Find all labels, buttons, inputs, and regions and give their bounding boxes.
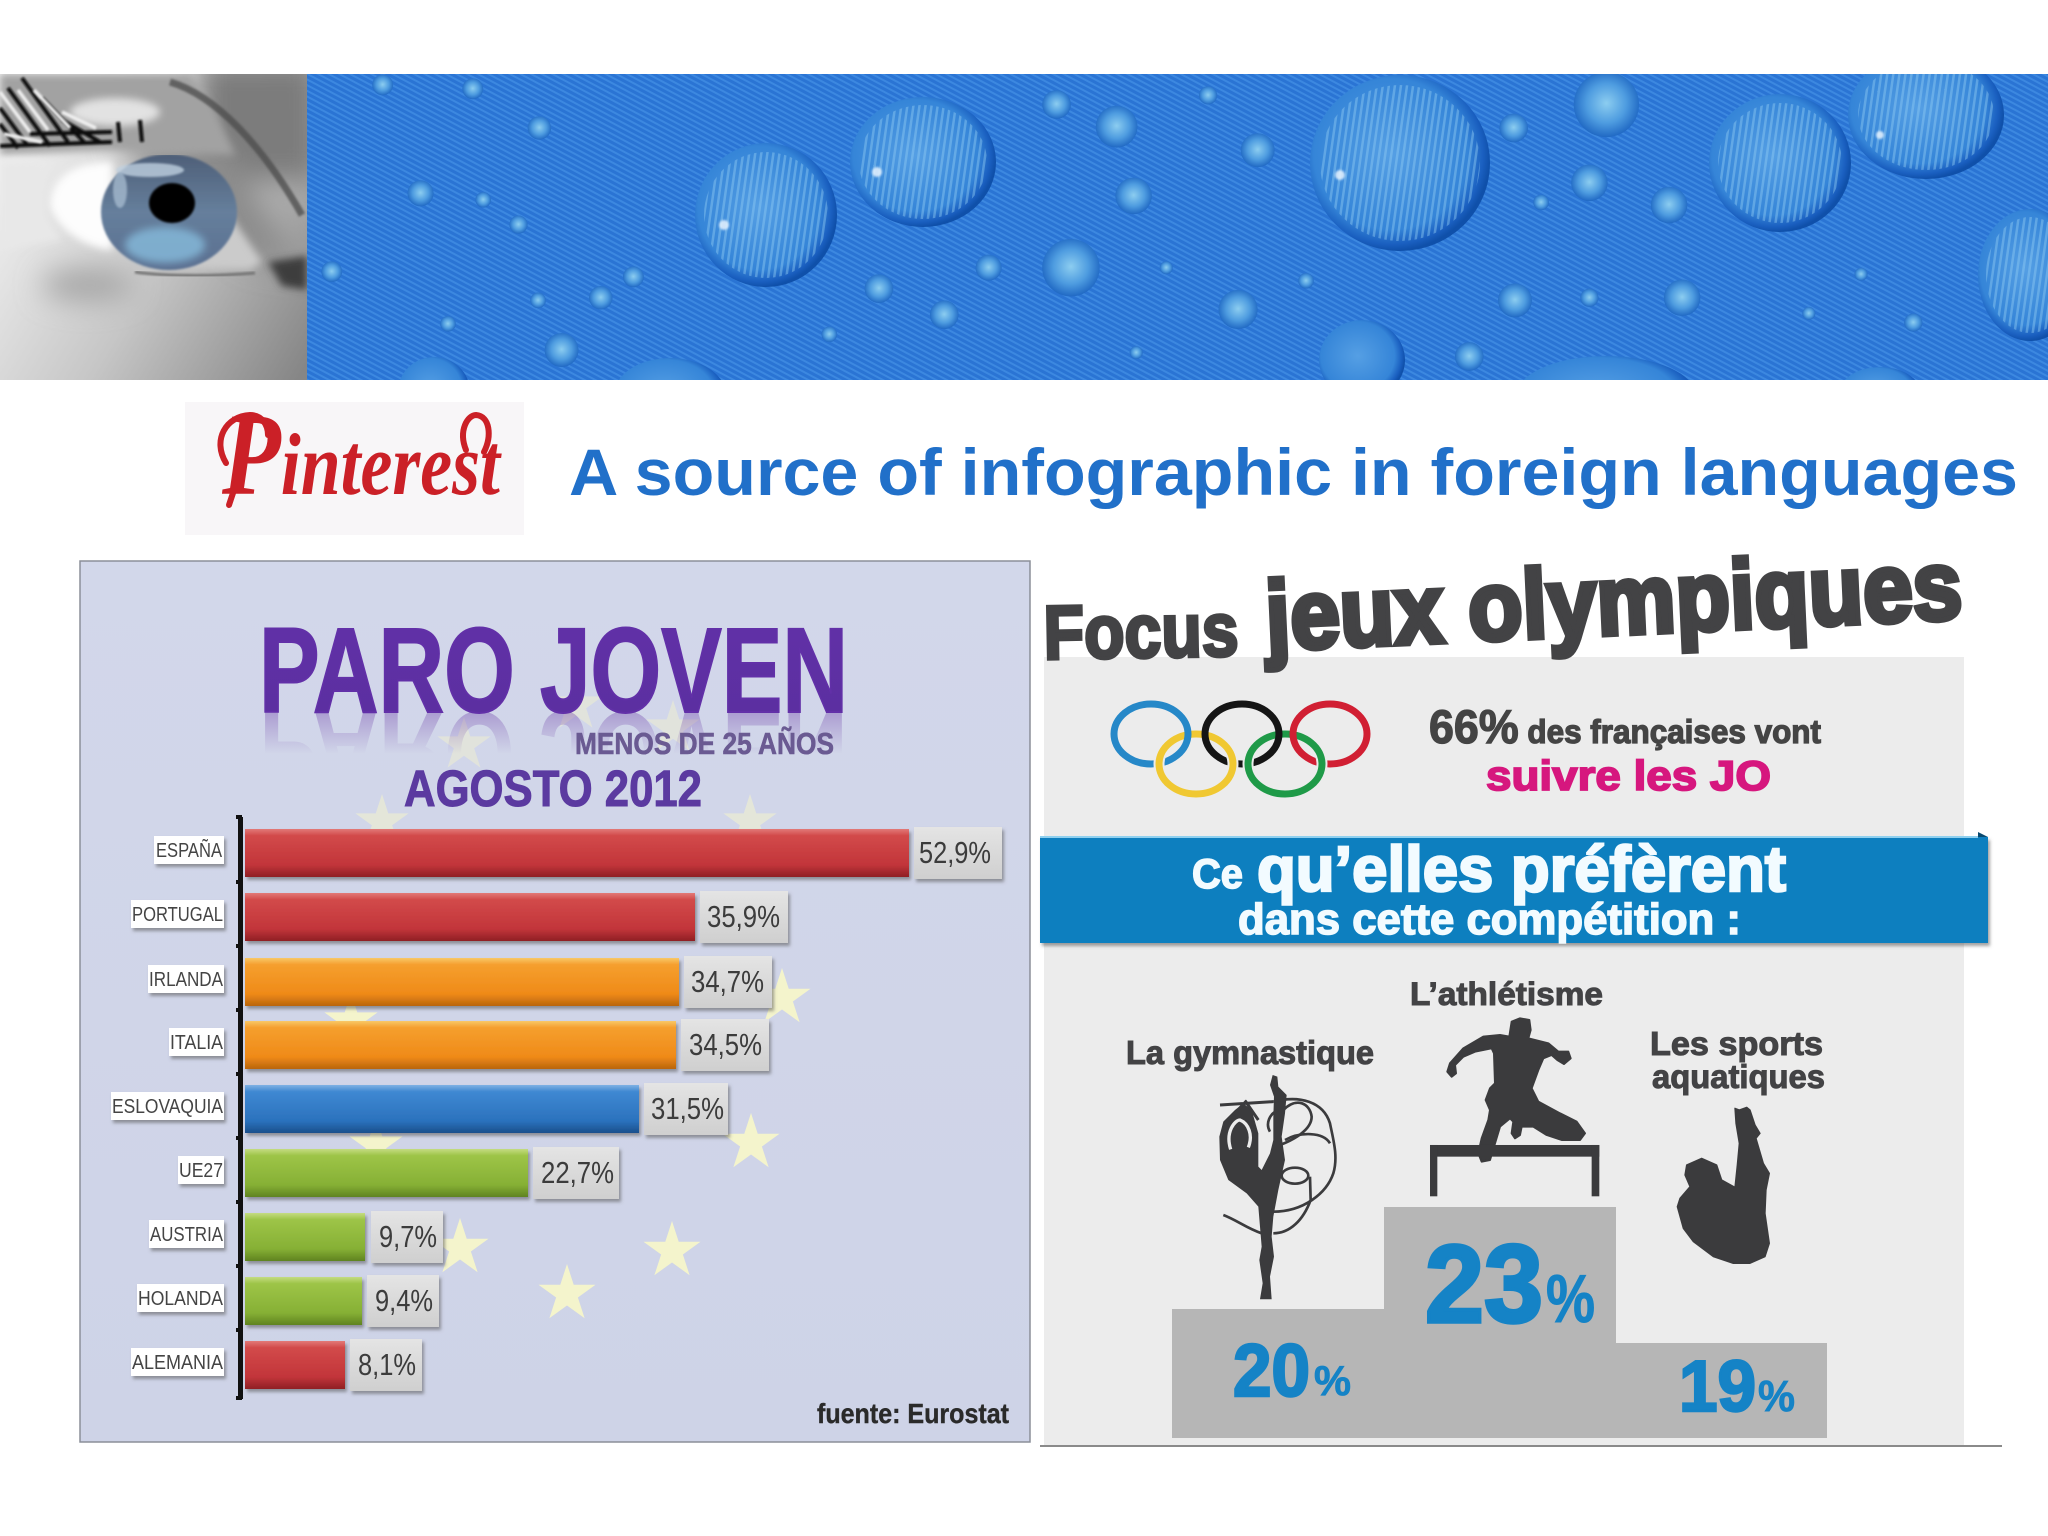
bar: HOLANDA: HOLANDA [138,1288,224,1310]
banner: ce qu'elles préfèrent: dans cette compétition : [1238,895,1741,944]
title: PARO JOVEN: PARO JOVEN [259,602,848,738]
subtitle: menos de 25 años: MENOS DE 25 AÑOS [575,726,834,761]
bar: AUSTRIA: 9,7% [379,1219,437,1254]
banner: ce qu'elles préfèrent: Ce [1192,850,1243,897]
iris [101,154,237,270]
panel: PARO JOVEN bar chart [80,561,1030,1442]
title: Focus jeux olympiques: jeux olympiques [1261,529,1964,671]
photo: water drops on blue fabric [307,74,2048,380]
bar: PORTUGAL: 35,9% [707,899,780,934]
banner: ce qu'elles préfèrent [1040,832,1988,944]
lashes [0,78,142,148]
stat: 23%: 23 [1425,1223,1543,1346]
podium [1172,1207,1827,1438]
bar: UE27 [178,1147,619,1199]
title: PARO JOVEN: PARO JOVEN [259,686,848,822]
banner: ce qu'elles préfèrent: qu’elles préfèrent [1257,833,1786,905]
panel: jeux olympiques [1040,529,2002,1447]
chart axis [236,815,243,1400]
bar: ALEMANIA: 8,1% [358,1347,416,1382]
stat: 20%: 20 [1233,1329,1310,1412]
label: L'athlétisme: L’athlétisme [1410,976,1603,1012]
sclera [50,162,112,250]
stat: 23%: % [1546,1261,1595,1337]
bar: AUSTRIA: AUSTRIA [150,1224,224,1246]
icon: hurdler [1430,1018,1599,1196]
bar: ALEMANIA [131,1339,422,1391]
bar: IRLANDA: 34,7% [691,964,764,999]
text: 66% des françaises vont: 66% des françaises vont [1429,700,1821,753]
stat: 20%: % [1314,1357,1351,1404]
bar: ESPAÑA: 52,9% [919,835,991,870]
bar: IRLANDA: IRLANDA [149,969,224,991]
bars [111,827,1002,1391]
title: Focus jeux olympiques: Focus [1043,588,1239,676]
stars background [324,677,811,1318]
bar: ITALIA [169,1019,769,1071]
bar: ITALIA: 34,5% [689,1027,762,1062]
bar: PORTUGAL: PORTUGAL [132,904,223,926]
logo: Pinterest: Pinterest [221,389,502,520]
icon: olympic rings [1114,704,1367,794]
bar: UE27: UE27 [179,1160,223,1182]
stat: 19% [1679,1347,1795,1427]
bar: ESPAÑA: ESPAÑA [156,838,223,862]
bar: ALEMANIA: ALEMANIA [132,1352,224,1374]
bar: UE27: 22,7% [541,1155,614,1190]
source: Eurostat: fuente: Eurostat [817,1398,1009,1429]
bar: AUSTRIA [149,1211,443,1263]
bar: ESPAÑA [154,827,1002,879]
shading [42,60,320,301]
bar: ESLOVAQUIA: 31,5% [651,1091,724,1126]
photo: grey eye [0,60,320,380]
icon: diver [1677,1107,1769,1263]
small drops [321,72,1922,371]
large drops [400,74,2048,380]
stat: 19%: % [1758,1372,1795,1421]
bar: ITALIA: ITALIA [170,1032,224,1054]
upper lid [0,74,235,155]
bar: HOLANDA [137,1275,439,1327]
stat: 20% [1233,1329,1351,1412]
bar: ESLOVAQUIA: ESLOVAQUIA [112,1096,224,1118]
label: Les sports aquatiques: Les sports [1650,1025,1823,1062]
subtitle: agosto 2012: AGOSTO 2012 [404,760,702,817]
heading: source of infographic: A source of infographic in foreign languages [569,435,2018,509]
title: PARO JOVEN [259,602,848,822]
bar: PORTUGAL [131,891,788,943]
title: Focus jeux olympiques [1043,529,1964,676]
bar: HOLANDA: 9,4% [375,1283,433,1318]
text: suivre les JO: suivre les JO [1486,752,1771,799]
bar: ESLOVAQUIA [111,1083,728,1135]
bar: IRLANDA [148,956,772,1008]
lid crease [170,82,302,215]
label: Les sports aquatiques [1650,1025,1825,1095]
label: Les sports aquatiques: aquatiques [1652,1058,1825,1095]
stat: 19%: 19 [1679,1347,1756,1427]
icon: gymnast with ribbon [1219,1075,1335,1299]
label: La gymnastique: La gymnastique [1126,1034,1374,1071]
